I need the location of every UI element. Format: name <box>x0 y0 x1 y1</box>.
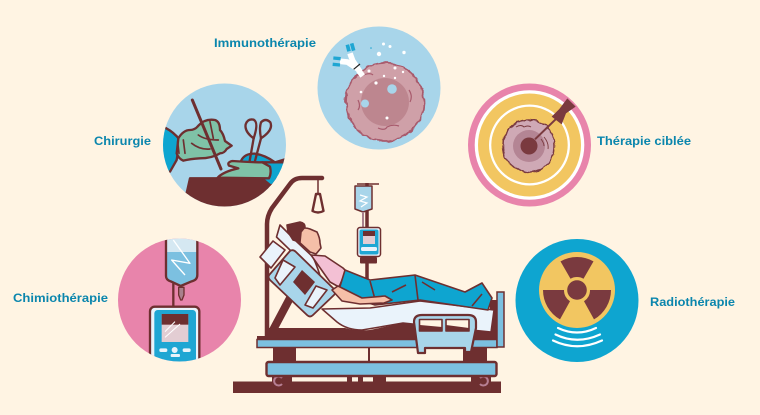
patient <box>260 222 492 353</box>
panel: radiothérapie circle <box>516 239 638 362</box>
panel: thérapie ciblée target <box>468 84 591 206</box>
shirt <box>311 255 346 287</box>
icon: tumour with concentric rings <box>503 120 555 172</box>
arm and hand <box>332 286 392 304</box>
backrest panel <box>268 250 336 316</box>
label: Radiothérapie: Radiothérapie <box>650 297 735 309</box>
icon: arrow <box>535 98 576 139</box>
panel: chirurgie circle <box>155 84 288 208</box>
bed head arch <box>267 178 322 345</box>
bed legs <box>273 345 487 363</box>
icon: antibody <box>333 43 363 76</box>
backrest head board <box>260 241 285 268</box>
icon: infusion bag <box>166 230 197 307</box>
lower blue frame <box>266 362 496 376</box>
icon: radiation waves <box>553 328 602 346</box>
side rail <box>414 315 476 353</box>
hanging handle <box>312 178 324 212</box>
diagonal strut <box>273 298 290 330</box>
icon: right hand with forceps <box>218 119 288 185</box>
panel: chimiothérapie circle <box>118 238 241 362</box>
footboard <box>497 292 504 347</box>
IV bag <box>355 186 372 212</box>
IV stand <box>355 183 380 292</box>
label: Chimiothérapie: Chimiothérapie <box>13 293 108 305</box>
head <box>287 222 321 254</box>
icon: left hand with scalpel <box>155 100 232 175</box>
panel: immunothérapie circle <box>318 26 440 150</box>
hospital bed <box>233 178 504 393</box>
label: Thérapie ciblée: Thérapie ciblée <box>597 136 691 148</box>
upper blue frame <box>257 340 497 348</box>
label: Chirurgie: Chirurgie <box>94 136 151 148</box>
icon: operating table <box>186 177 277 206</box>
pillow <box>276 225 322 282</box>
icon: tumour cell <box>346 63 424 141</box>
wheels and floor bar <box>233 370 501 393</box>
pants <box>338 270 492 310</box>
icon: infusion pump <box>148 306 200 362</box>
icon: floating particles <box>370 42 406 56</box>
label: Immunothérapie: Immunothérapie <box>214 38 316 50</box>
mattress support <box>257 300 497 340</box>
icon: radiation trefoil <box>543 257 611 319</box>
small pump <box>358 228 380 264</box>
mattress <box>322 301 494 332</box>
